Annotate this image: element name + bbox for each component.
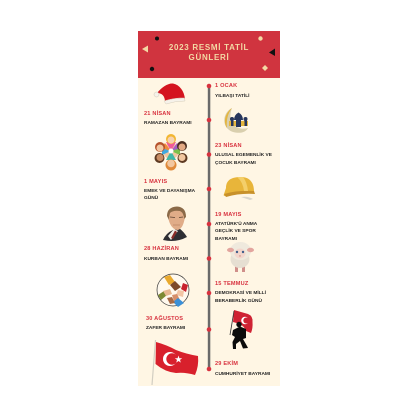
icon: portrait bbox=[163, 206, 187, 241]
text: 1 Ocak bbox=[215, 83, 250, 98]
text: 15 Temmuz: 15 TEMMUZ bbox=[215, 281, 248, 287]
text: 29 Ekim bbox=[215, 360, 270, 376]
header banner bbox=[138, 31, 280, 78]
text: 1 Mayis: EMEK VE DAYANIŞMA bbox=[144, 188, 195, 194]
text: 29 Ekim: CUMHURİYET BAYRAMI bbox=[215, 372, 270, 376]
text: 19 Mayis: ATATÜRK'Ü ANMA bbox=[215, 222, 257, 227]
text: 1 Ocak: 1 OCAK bbox=[215, 83, 237, 89]
text: 21 Nisan bbox=[144, 110, 192, 126]
text: 1 Ocak: YILBAŞI TATİLİ bbox=[215, 94, 249, 98]
icon: joined hands bbox=[157, 274, 189, 307]
icon: crescent and mosque bbox=[224, 108, 248, 133]
icon: children circle bbox=[154, 134, 188, 170]
text: 1 Mayis bbox=[144, 179, 195, 200]
icon: soldier with flag bbox=[230, 310, 253, 349]
text: 23 Nisan: 23 NİSAN bbox=[215, 143, 242, 149]
text: 28 Haziran: KURBAN BAYRAMI bbox=[144, 256, 188, 262]
text: 28 Haziran: 28 HAZİRAN bbox=[144, 246, 179, 252]
text: 21 Nisan: 21 NİSAN bbox=[144, 111, 171, 117]
icon: Turkish flag bbox=[152, 340, 198, 385]
text: 23 Nisan: ÇOCUK BAYRAMI bbox=[215, 160, 256, 166]
text: 30 Agustos bbox=[146, 315, 185, 330]
text: 29 Ekim: 29 EKİM bbox=[215, 361, 238, 367]
text: 15 Temmuz bbox=[215, 281, 266, 304]
text: 15 Temmuz: BERABERLİK GÜNÜ bbox=[215, 298, 262, 304]
text: 19 Mayis bbox=[215, 212, 257, 242]
icon: lamb bbox=[227, 242, 254, 272]
header confetti bbox=[142, 36, 275, 71]
timeline bbox=[207, 84, 211, 371]
text: 23 Nisan: ULUSAL EGEMENLİK VE bbox=[215, 153, 272, 158]
text: 19 Mayis: GEÇLİK VE SPOR bbox=[215, 229, 256, 234]
icon: hard hat bbox=[224, 177, 255, 200]
text: 15 Temmuz: DEMOKRASİ VE MİLLİ bbox=[215, 291, 266, 296]
text: 30 Agustos: 30 AĞUSTOS bbox=[146, 316, 183, 322]
text: 1 Mayis: GÜNÜ bbox=[144, 196, 158, 200]
title: GÜNLERİ bbox=[189, 53, 229, 62]
text: 23 Nisan bbox=[215, 142, 272, 166]
title: 2023 RESMİ TATİL bbox=[169, 43, 249, 52]
text: 19 Mayis: 19 MAYIS bbox=[215, 212, 242, 218]
cream panel bbox=[138, 78, 280, 386]
title bbox=[169, 43, 249, 62]
text: 28 Haziran bbox=[144, 245, 188, 262]
icon: santa hat bbox=[154, 83, 185, 104]
text: 19 Mayis: BAYRAMI bbox=[215, 236, 237, 242]
text: 1 Mayis: 1 MAYIS bbox=[144, 179, 167, 185]
text: 30 Agustos: ZAFER BAYRAMI bbox=[146, 326, 185, 330]
text: 21 Nisan: RAMAZAN BAYRAMI bbox=[144, 120, 192, 126]
